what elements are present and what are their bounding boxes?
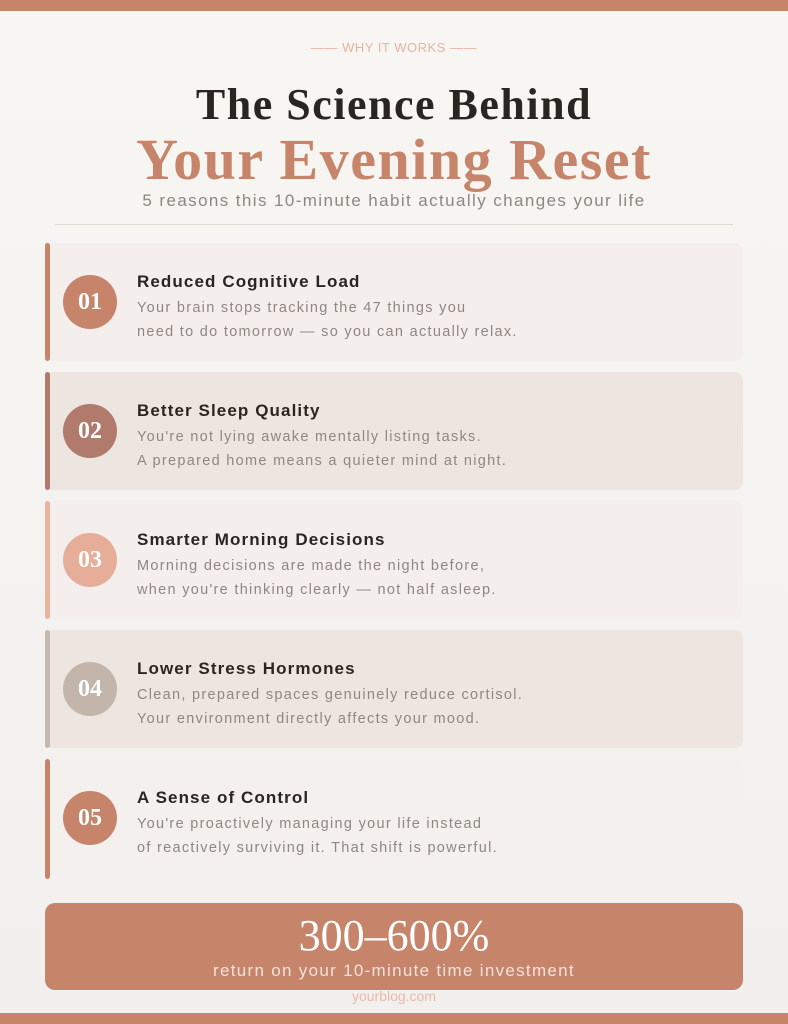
- top bar: [0, 0, 788, 11]
- title: The Science Behind: [196, 80, 592, 129]
- callout banner: [45, 903, 743, 990]
- bottom bar: [0, 1013, 788, 1024]
- icon: 04: 04: [78, 676, 102, 702]
- heading: A Sense of Control: [137, 788, 309, 807]
- text: [137, 558, 497, 598]
- text: You're proactively managing your life instead: [137, 816, 482, 832]
- icon: 03: [63, 533, 117, 587]
- text: when you're thinking clearly — not half asleep.: [137, 582, 497, 598]
- text: [137, 429, 507, 469]
- heading: Reduced Cognitive Load: [137, 272, 360, 291]
- heading: Better Sleep Quality: [137, 401, 321, 420]
- text: A prepared home means a quieter mind at night.: [137, 453, 507, 469]
- text: need to do tomorrow — so you can actually relax.: [137, 324, 518, 340]
- text: Your environment directly affects your mood.: [137, 711, 480, 727]
- text: Clean, prepared spaces genuinely reduce cortisol.: [137, 687, 523, 703]
- card 1: [45, 243, 743, 361]
- icon: 02: 02: [78, 418, 102, 444]
- title accent: Your Evening Reset: [136, 127, 652, 192]
- icon: 01: 01: [78, 289, 102, 315]
- card 2: [45, 372, 743, 490]
- icon: 05: 05: [78, 805, 102, 831]
- stat caption: return on your 10-minute time investment: [213, 961, 575, 980]
- card 3: [45, 501, 743, 619]
- stat: 300–600%: [299, 911, 489, 960]
- card 5: [45, 759, 743, 879]
- text: of reactively surviving it. That shift is powerful.: [137, 840, 498, 856]
- icon: 05: [63, 791, 117, 845]
- icon: 02: [63, 404, 117, 458]
- text: [137, 687, 523, 727]
- icon: 01: [63, 275, 117, 329]
- text: Morning decisions are made the night before,: [137, 558, 485, 574]
- heading: Lower Stress Hormones: [137, 659, 356, 678]
- text: Your brain stops tracking the 47 things you: [137, 300, 466, 316]
- footer: yourblog.com: [352, 988, 436, 1004]
- text: You're not lying awake mentally listing tasks.: [137, 429, 482, 445]
- icon: 04: [63, 662, 117, 716]
- text: [137, 300, 518, 340]
- card 4: [45, 630, 743, 748]
- text: [137, 816, 498, 856]
- heading: Smarter Morning Decisions: [137, 530, 386, 549]
- subtitle: 5 reasons this 10-minute habit actually changes your life: [142, 191, 646, 210]
- eyebrow label: —— WHY IT WORKS ——: [311, 40, 477, 55]
- icon: 03: 03: [78, 547, 102, 573]
